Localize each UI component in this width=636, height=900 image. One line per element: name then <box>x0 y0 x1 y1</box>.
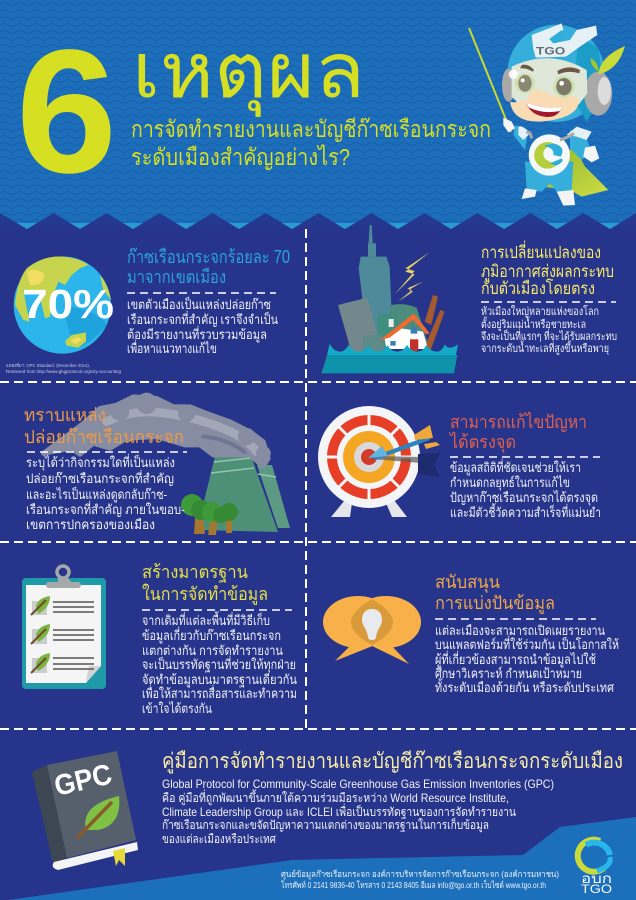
subtitle: การจัดทำรายงานและบัญชีก๊าซเรือนกระจก <box>131 116 491 142</box>
body text: GPC description: Climate Leadership Group และ ICLEI เพื่อเป็นบรรทัดฐานของการจัดทำรายงาน <box>162 803 516 819</box>
body text <box>435 623 619 695</box>
dividers: dashed grid <box>0 229 636 729</box>
icon: TGO mascot: TGO <box>536 46 566 58</box>
heading: ได้ตรงจุด <box>448 431 516 453</box>
heading: มาจากเขตเมือง <box>127 267 226 287</box>
body text: GPC description: Global Protocol for Community-Scale Greenhouse Gas Emission Inventories (GPC) <box>162 777 554 791</box>
icon: pointer stick <box>469 28 511 132</box>
body text: ระบุได้ว่ากิจกรรมใดที่เป็นแหล่ง <box>26 453 175 471</box>
icon: globe with 70% <box>14 256 114 354</box>
source note <box>6 362 121 374</box>
logo: TGO <box>578 840 612 896</box>
footer contact text: ศูนย์ข้อมูลก๊าซเรือนกระจก องค์การบริหารจัดการก๊าซเรือนกระจก (องค์การมหาชน) <box>281 869 559 880</box>
body text: เขตตัวเมืองเป็นแหล่งปล่อยก๊าซ <box>127 295 271 312</box>
source note: แหล่งที่มา: GPC Standard. (December 2014). <box>6 362 90 368</box>
footer contact text: โทรศัพท์ 0 2141 9836-40 โทรสาร 0 2143 8405 อีเมล info@tgo.or.th เว็บไซต์ www.tgo.or.th <box>281 879 546 890</box>
body text: และมีตัวชี้วัดความสำเร็จที่แม่นยำ <box>450 503 601 520</box>
heading: สนับสนุน <box>435 572 500 593</box>
body text: GPC description: ก๊าซเรือนกระจกและขจัดปัญหาความแตกต่างของมาตรฐานในการเก็บข้อมูล <box>162 817 489 833</box>
title: เหตุผล: เหตุผล <box>132 29 365 117</box>
heading: สร้างมาตรฐาน <box>142 562 248 583</box>
body text <box>142 611 297 716</box>
body text: จากเดิมที่แต่ละพื้นที่มีวิธีเก็บ <box>142 611 270 628</box>
subtitle: ระดับเมืองสำคัญอย่างไร? <box>131 144 350 170</box>
icon: GPC book: GPC <box>51 759 115 803</box>
heading: การแบ่งปันข้อมูล <box>435 593 555 614</box>
heading <box>481 240 614 298</box>
body text: เขตการปกครองของเมือง <box>26 517 155 532</box>
body text: GPC description <box>162 777 554 846</box>
icon: speech bubbles with light bulb <box>323 596 421 664</box>
body text: จัดทำข้อมูลบนมาตรฐานเดียวกัน <box>142 672 297 688</box>
heading: ในการจัดทำข้อมูล <box>142 583 268 605</box>
heading: การเปลี่ยนแปลงของ <box>481 240 601 262</box>
icon: TGO mascot <box>502 23 625 206</box>
logo: TGO: อบก <box>581 871 612 886</box>
header band with wave pattern and zigzag edge <box>0 0 636 231</box>
body text: ผู้ที่เกี่ยวข้องสามารถนำข้อมูลไปใช้ <box>435 651 596 668</box>
footer contact text <box>281 869 559 890</box>
subtitle <box>131 116 491 170</box>
heading: ปล่อยก๊าซเรือนกระจก <box>24 427 184 447</box>
heading: ก๊าซเรือนกระจกร้อยละ 70 <box>127 247 290 267</box>
body text: จากระดับน้ำทะเลที่สูงขึ้นหรือพายุ <box>481 340 609 355</box>
body text: GPC description: ของแต่ละเมืองหรือประเทศ <box>162 832 276 846</box>
panel: climate impact on cities <box>321 225 617 373</box>
logo: TGO: TGO <box>581 882 612 896</box>
body text: แตกต่างกัน การจัดทำรายงาน <box>142 643 283 658</box>
body text: หัวเมืองใหญ่หลายแห่งของโลก <box>481 304 599 318</box>
heading <box>24 405 184 447</box>
body text: ตั้งอยู่ริมแม่น้ำหรือชายทะเล <box>481 316 586 331</box>
heading <box>435 572 555 614</box>
body text: ปัญหาก๊าซเรือนกระจกได้ตรงจุด <box>450 490 598 506</box>
body text: GPC description: คือ คู่มือที่ถูกพัฒนาขึ้นภายใต้ความร่วมมือระหว่าง World Resource Institute, <box>162 789 509 806</box>
body text: ข้อมูลเกี่ยวกับก๊าซเรือนกระจก <box>142 627 281 644</box>
big number 6: 6 <box>16 14 117 210</box>
body text: ต้องมีรายงานที่รวบรวมข้อมูล <box>127 326 267 343</box>
body text: เข้าใจได้ตรงกัน <box>142 701 212 716</box>
icon: target with arrow <box>318 406 440 517</box>
body text: เรือนกระจกที่สำคัญ ภายในขอบ- <box>26 501 185 517</box>
body text <box>26 453 185 532</box>
heading: สามารถแก้ไขปัญหา <box>450 411 587 432</box>
heading: ทราบแหล่ง <box>24 405 106 425</box>
heading <box>142 562 268 605</box>
heading: กับตัวเมืองโดยตรง <box>481 278 595 298</box>
body text <box>450 459 601 520</box>
heading <box>448 411 587 453</box>
body text <box>481 304 617 355</box>
body text: เพื่อให้สามารถสื่อสารและทำความ <box>142 685 297 701</box>
body text: ปล่อยก๊าซเรือนกระจกที่สำคัญ <box>26 470 174 486</box>
panel: create data standard <box>22 562 297 716</box>
footer band: blue angled shape <box>8 817 636 900</box>
body text: แต่ละเมืองจะสามารถเปิดเผยรายงาน <box>435 623 605 638</box>
body text: จะเป็นบรรทัดฐานที่ช่วยให้ทุกฝ่าย <box>142 655 296 673</box>
icon: GPC book <box>32 751 138 870</box>
panel: solve the right problem <box>318 406 601 520</box>
body text: เรือนกระจกที่สำคัญ เราจึงจำเป็น <box>127 310 278 327</box>
body text: และอะไรเป็นแหล่งดูดกลับก๊าซ- <box>26 485 167 503</box>
heading <box>127 247 290 287</box>
body text <box>127 295 278 356</box>
body text: กำหนดกลยุทธ์ในการแก้ไข <box>450 475 570 491</box>
panel: know emission sources <box>24 393 290 535</box>
body text: ศึกษาวิเคราะห์ กำหนดเป้าหมาย <box>435 666 582 681</box>
icon: clipboard with leaves <box>22 566 106 689</box>
icon: globe with 70%: 70% <box>22 281 114 327</box>
panel: data sharing <box>323 572 619 695</box>
panel: 70 percent from cities <box>6 247 290 374</box>
source note: Retrieved from http://www.ghgprotocol.org/city-accounting <box>6 369 121 374</box>
body text: เพื่อหาแนวทางแก้ไข <box>127 340 217 356</box>
body text: ข้อมูลสถิติที่ชัดเจนช่วยให้เรา <box>450 459 581 476</box>
icon: cooling towers with smoke and trees <box>43 393 290 535</box>
icon: flooded city <box>321 225 458 373</box>
